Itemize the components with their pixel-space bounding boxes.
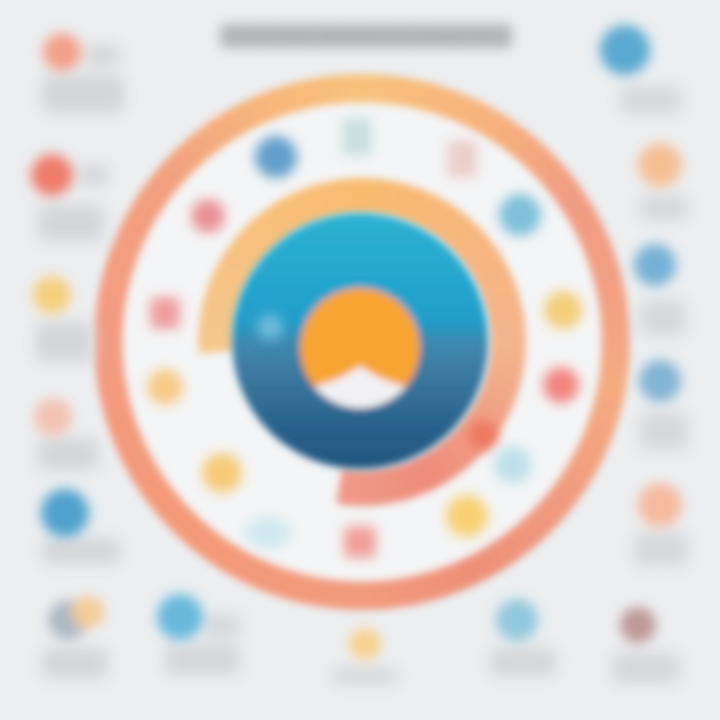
side text: right column: [612, 86, 688, 684]
donut centre: white mound: [310, 360, 410, 414]
title: Circular Wellness Diagram: [233, 25, 499, 48]
bottom row icons: [157, 594, 538, 660]
central donut: [232, 213, 488, 469]
bottom row text: [165, 615, 556, 684]
inner arc: [192, 172, 532, 512]
donut centre: orange sun: [300, 288, 420, 408]
ring icons: [147, 118, 582, 558]
side text: left column: [36, 45, 124, 678]
side icons: right column: [600, 25, 682, 643]
outer ring: [90, 68, 636, 616]
small marker on donut: [257, 314, 283, 340]
inner disc inside outer ring: [115, 95, 609, 589]
side icons: left column: [31, 33, 104, 640]
accent near arc end: [468, 420, 498, 450]
